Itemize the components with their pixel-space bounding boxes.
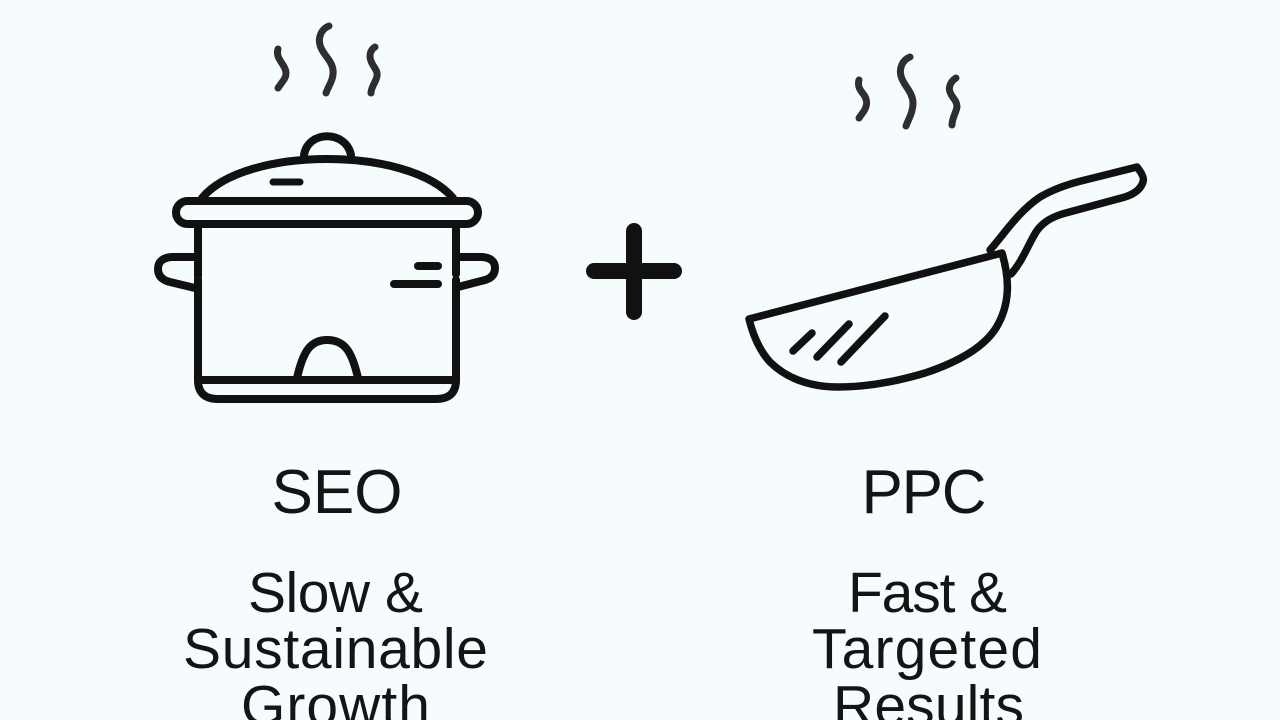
icon: PPC steam [858,57,957,126]
icon: SEO steam [277,26,377,93]
text block: PPC description: Targeted [812,617,1042,681]
text block: SEO description [183,561,488,720]
text block: SEO description: Slow & [248,561,423,625]
text block: SEO description: Sustainable [183,617,488,681]
icon: plus sign [594,231,674,312]
text block: PPC description [812,561,1042,720]
heading: SEO: SEO [272,458,402,527]
icon: frying pan [749,167,1143,387]
heading: PPC: PPC [862,458,986,527]
text block: PPC description: Fast & [848,561,1007,625]
icon: stock pot [158,136,495,399]
